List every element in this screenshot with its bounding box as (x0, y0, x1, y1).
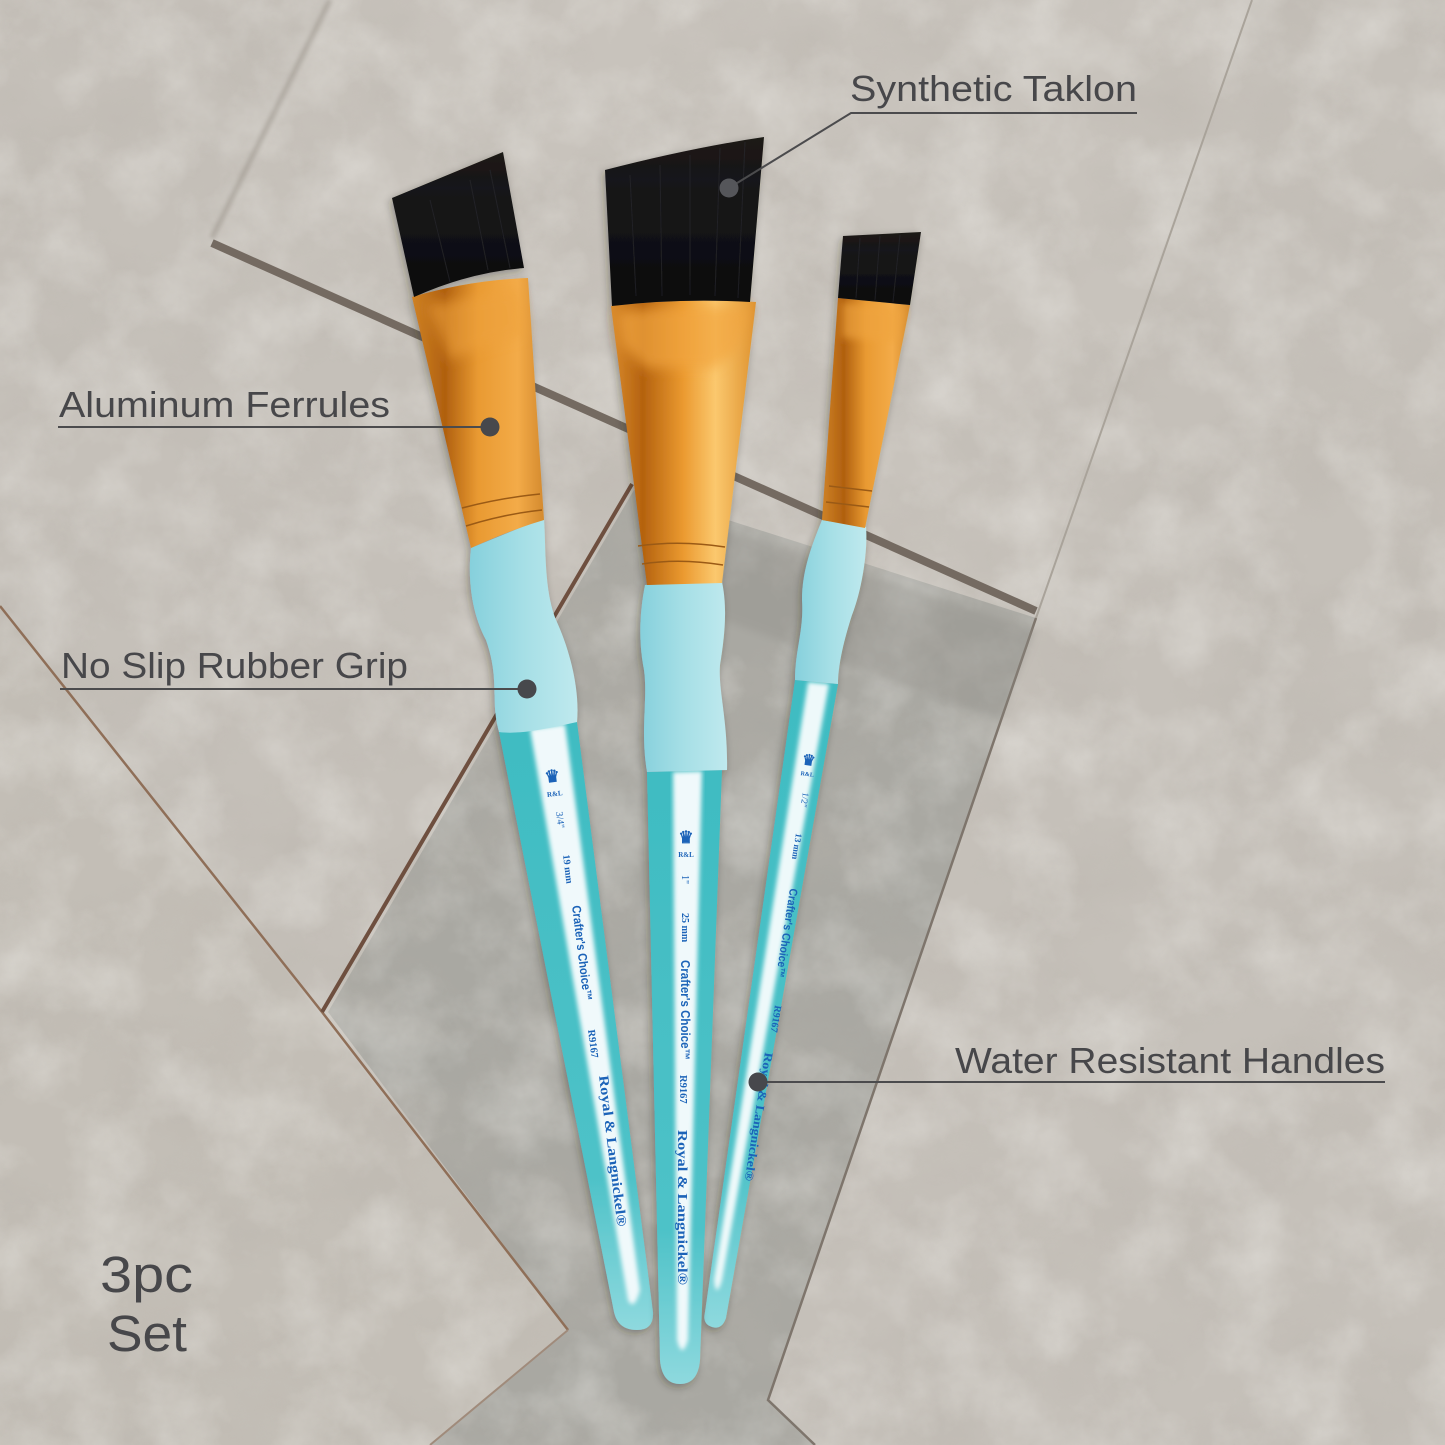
handle (647, 770, 722, 1384)
handle lettering: 3/4" (553, 811, 566, 829)
bristles (392, 152, 524, 297)
grip (470, 518, 578, 733)
grip (640, 582, 727, 772)
handle lettering: R9167 (768, 1005, 783, 1033)
handle lettering: 1/2" (799, 792, 811, 809)
handle lettering: 19 mm (560, 854, 575, 885)
handle lettering: Royal & Langnickel® (674, 1130, 689, 1286)
handle (704, 680, 838, 1328)
set size label: Set (107, 1305, 187, 1362)
bristles (605, 137, 764, 306)
callout: Synthetic Taklon: Synthetic Taklon (850, 68, 1137, 109)
handle highlight (714, 682, 829, 1290)
grip (795, 520, 866, 684)
ferrule crimp (428, 288, 526, 360)
handle lettering: Crafter's Choice™ (569, 905, 595, 1002)
handle lettering: R&L (547, 789, 563, 799)
handle lettering (544, 766, 629, 1228)
handle lettering: ♛ (801, 752, 816, 770)
tile: top centre (212, 0, 1252, 606)
brush 1: 3/4 inch (392, 152, 653, 1330)
callout: Aluminum Ferrules: Aluminum Ferrules (59, 384, 390, 425)
handle lettering: Royal & Langnickel® (595, 1075, 629, 1228)
handle lettering (742, 752, 816, 1182)
handle lettering: R&L (678, 851, 694, 859)
brush 3: 1/2 inch (704, 232, 921, 1328)
handle lettering (674, 828, 694, 1286)
handle lettering: Crafter's Choice™ (678, 960, 692, 1060)
callout: Synthetic Taklon (720, 68, 1137, 198)
set size label: 3pc (100, 1246, 193, 1303)
handle lettering: R9167 (677, 1075, 688, 1104)
handle lettering: 1" (679, 875, 690, 884)
handle (499, 722, 653, 1330)
tile: upper left (0, 0, 632, 1012)
handle lettering: 25 mm (679, 913, 690, 943)
callout: Aluminum Ferrules (58, 384, 500, 436)
tile: lower centre, darker (328, 490, 1036, 1445)
handle lettering: 13 mm (790, 833, 804, 861)
tile: large right (768, 0, 1445, 1445)
handle highlight (673, 771, 702, 1350)
handle lettering: Royal & Langnickel® (742, 1052, 776, 1182)
handle lettering: Crafter's Choice™ (773, 888, 799, 978)
ferrule crimp (842, 302, 905, 342)
handle lettering: ♛ (544, 766, 561, 787)
set size label (100, 1246, 193, 1362)
brush 2: 1 inch (605, 137, 764, 1384)
handle lettering: ♛ (678, 828, 694, 847)
ferrule (822, 298, 910, 528)
callout: Water Resistant Handles: Water Resistant Handles (955, 1040, 1385, 1081)
ferrule (611, 301, 756, 585)
handle highlight (530, 724, 640, 1304)
callout: No Slip Rubber Grip: No Slip Rubber Grip (61, 645, 408, 686)
tile: lower left (0, 608, 568, 1445)
ferrule crimp highlight (618, 307, 750, 368)
ferrule (412, 278, 544, 548)
handle lettering: R9167 (585, 1029, 599, 1059)
handle lettering: R&L (800, 771, 814, 779)
callout: No Slip Rubber Grip (60, 645, 536, 698)
callout: Water Resistant Handles (748, 1040, 1385, 1092)
bristles (838, 232, 921, 305)
